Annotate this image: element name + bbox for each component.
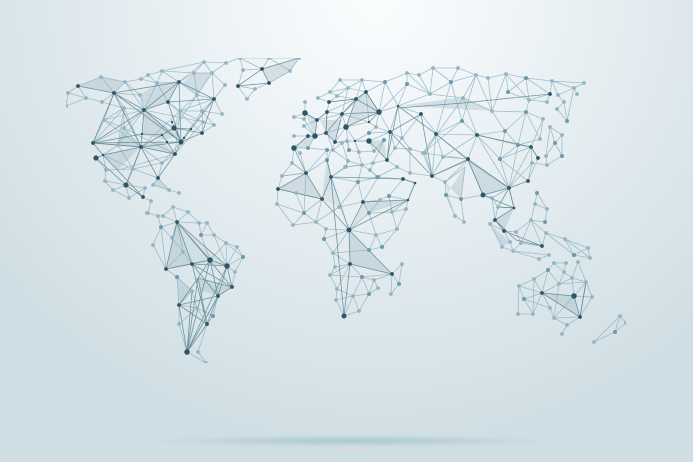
shaded facets bbox=[445, 160, 514, 247]
dark nodes bbox=[542, 293, 580, 317]
dark nodes bbox=[278, 173, 403, 274]
dark links bbox=[166, 222, 232, 352]
dark links bbox=[278, 148, 415, 316]
light links bbox=[148, 207, 243, 363]
hub nodes bbox=[344, 230, 349, 316]
shaded facet bbox=[542, 293, 580, 317]
medium nodes bbox=[161, 227, 243, 316]
medium nodes bbox=[308, 82, 407, 160]
middle-east band facet bbox=[398, 97, 492, 111]
light nodes bbox=[277, 167, 406, 311]
ground shadow bbox=[100, 434, 600, 448]
light nodes bbox=[240, 58, 299, 99]
world map bbox=[66, 58, 626, 363]
hub nodes bbox=[187, 260, 227, 352]
dark nodes bbox=[78, 82, 214, 197]
medium nodes bbox=[304, 177, 399, 294]
map: Australia and New Zealand bbox=[518, 255, 626, 342]
small dark nodes bbox=[408, 183, 415, 200]
small dark nodes bbox=[355, 106, 398, 141]
shaded facets bbox=[294, 92, 387, 160]
map: Africa bbox=[277, 148, 415, 316]
map: North America bbox=[66, 58, 240, 213]
small dark nodes bbox=[103, 122, 191, 155]
dark links bbox=[78, 82, 214, 197]
dark links bbox=[542, 282, 586, 317]
dark links bbox=[398, 94, 550, 246]
shaded facet bbox=[262, 58, 299, 83]
light links bbox=[66, 58, 240, 213]
shaded facets bbox=[278, 160, 408, 274]
hub nodes bbox=[96, 128, 181, 185]
dark nodes bbox=[308, 92, 421, 160]
light links bbox=[277, 161, 415, 316]
shaded facets bbox=[166, 222, 232, 305]
dark nodes bbox=[166, 222, 232, 324]
light links bbox=[423, 68, 590, 259]
medium nodes bbox=[446, 78, 574, 255]
light nodes bbox=[518, 262, 626, 342]
shaded facets bbox=[78, 73, 212, 190]
light links bbox=[282, 68, 437, 177]
light links bbox=[238, 58, 299, 99]
light nodes bbox=[282, 68, 433, 177]
dark links bbox=[294, 92, 432, 176]
small dark nodes bbox=[513, 207, 515, 209]
light nodes bbox=[66, 62, 226, 213]
light nodes bbox=[423, 68, 590, 259]
dark nodes bbox=[238, 69, 269, 86]
hub nodes bbox=[294, 112, 379, 148]
dark links bbox=[238, 58, 299, 86]
dark nodes bbox=[432, 94, 550, 246]
map: Greenland bbox=[238, 58, 299, 99]
light nodes bbox=[147, 207, 237, 363]
map: Asia bbox=[398, 68, 590, 259]
hub node bbox=[571, 293, 577, 299]
light links bbox=[518, 262, 626, 342]
map: Europe bbox=[282, 68, 492, 177]
map: South America bbox=[147, 207, 243, 363]
hub node bbox=[480, 192, 486, 198]
medium nodes bbox=[524, 255, 615, 332]
